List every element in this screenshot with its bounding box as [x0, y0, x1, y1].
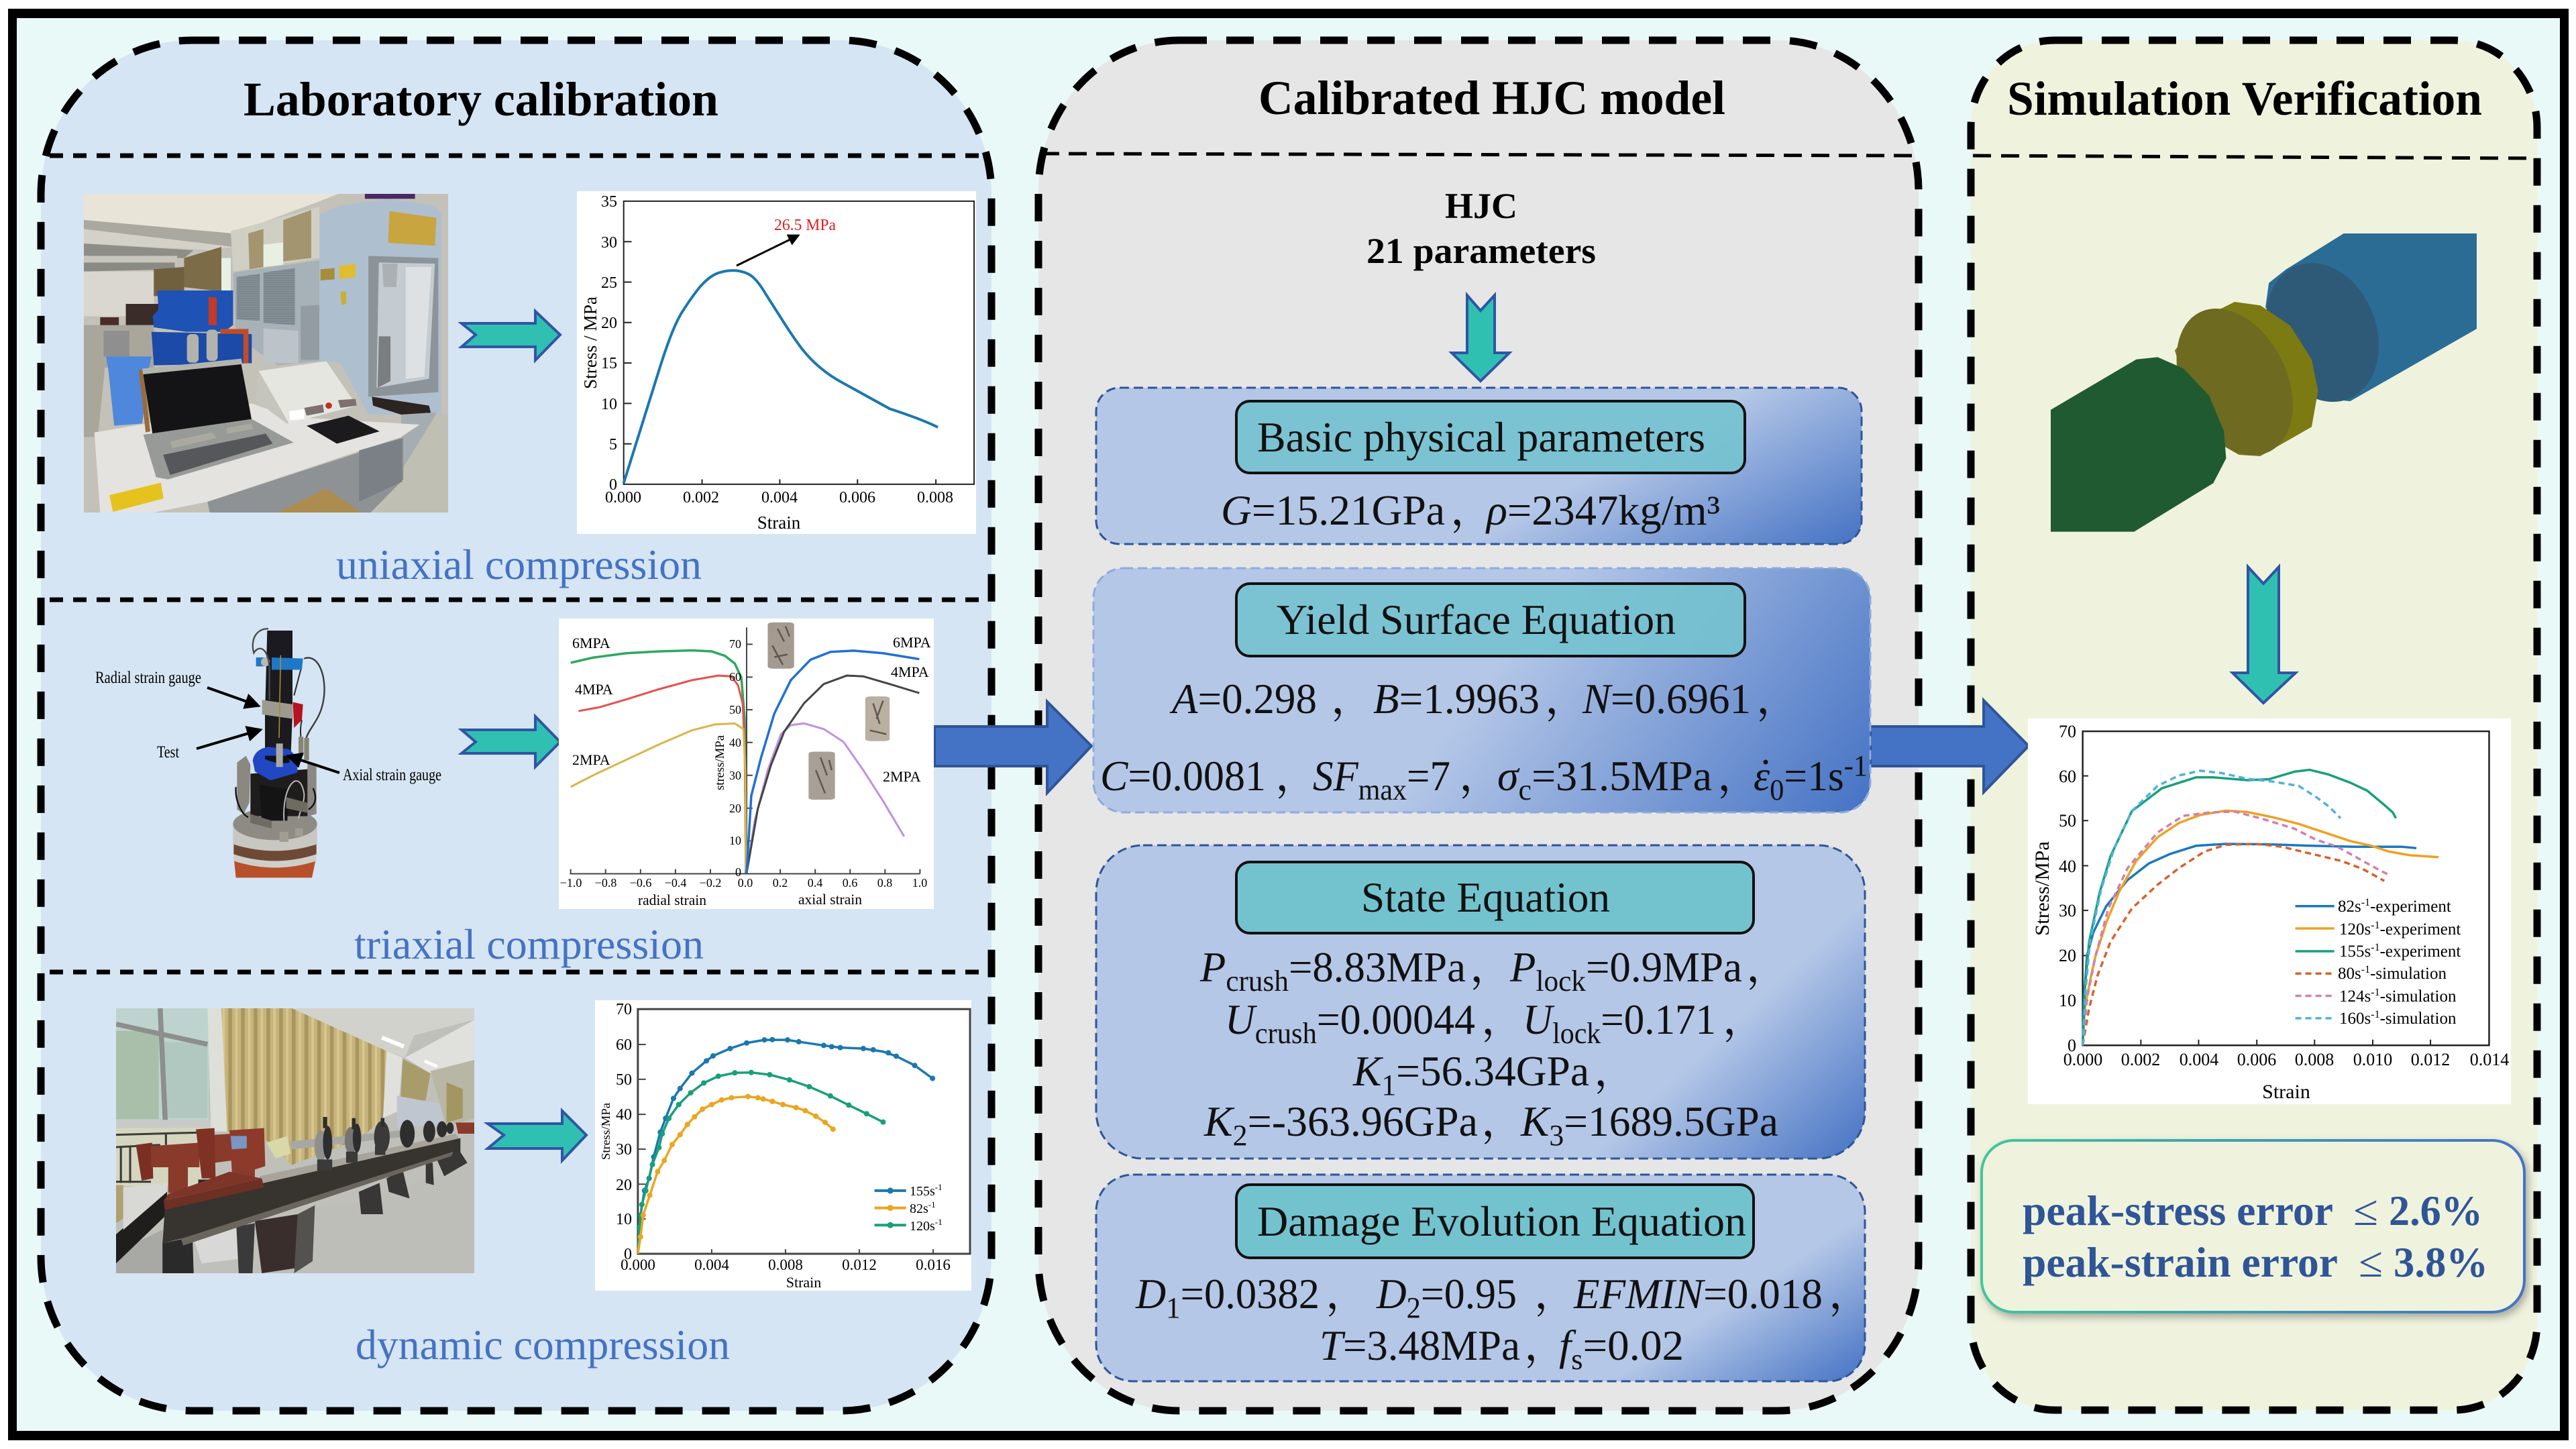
- chart: experiment vs simulation: 70: [2059, 722, 2076, 741]
- photo: split Hopkinson bar: [116, 1008, 474, 1273]
- box: state equation: P: [1199, 943, 1226, 991]
- photo: triaxial apparatus: [233, 628, 325, 877]
- chart: triaxial stress-strain: 30: [729, 769, 741, 782]
- callout: peak errors: ≤: [2359, 1238, 2383, 1286]
- box: damage evolution equation: T=3.48MPa: [1320, 1322, 1520, 1369]
- box: yield surface equation: ε: [1754, 752, 1770, 800]
- chart: triaxial stress-strain: −0.8: [595, 876, 616, 890]
- box: yield surface equation: =7: [1407, 752, 1450, 800]
- box: damage evolution equation: ，: [1326, 1270, 1368, 1318]
- box: yield surface equation: ，: [1717, 752, 1760, 800]
- box: state equation: lock: [1536, 965, 1586, 998]
- panel: simulation verification: [1971, 40, 2537, 1410]
- heading: simulation verification: Simulation Verification: [2007, 72, 2482, 125]
- box: state equation: [1096, 845, 1865, 1159]
- chart: dynamic stress-strain: 60: [616, 1036, 632, 1054]
- box: yield surface equation: A=0.298: [1169, 675, 1317, 722]
- text: HJC 21 parameters: [1366, 186, 1596, 271]
- box: yield surface equation: SF: [1313, 752, 1359, 800]
- box: yield surface equation: ，: [1545, 675, 1588, 722]
- labels and arrows: triaxial apparatus: [95, 669, 441, 784]
- chart: experiment vs simulation: 0: [2068, 1036, 2076, 1055]
- callout: peak errors: peak-stress error: [2023, 1187, 2333, 1234]
- box: state equation: K: [1352, 1047, 1384, 1095]
- labels and arrows: triaxial apparatus: Radial strain gauge: [95, 669, 201, 687]
- box: damage evolution equation: [1096, 1175, 1872, 1381]
- callout: peak errors: 3.8%: [2394, 1238, 2488, 1286]
- chart: experiment vs simulation: 82s: [2338, 898, 2361, 916]
- chart: experiment vs simulation: 120s: [2339, 920, 2371, 938]
- chart: uniaxial stress-strain: 0.002: [683, 489, 719, 506]
- chart: experiment vs simulation: 60: [2059, 767, 2076, 786]
- label: dynamic compression: dynamic compression: [356, 1321, 730, 1368]
- box: damage evolution equation: s: [1571, 1343, 1582, 1376]
- chart: triaxial stress-strain: 60: [729, 670, 741, 684]
- chart: experiment vs simulation: 0.010: [2353, 1050, 2392, 1069]
- chart: triaxial stress-strain: 0.2: [773, 876, 788, 890]
- callout: peak errors: 2.6%: [2389, 1187, 2483, 1234]
- box: state equation: ，: [1746, 943, 1789, 991]
- box: basic physical parameters: Basic physical parameters: [1257, 413, 1705, 461]
- chart: dynamic stress-strain: 40: [616, 1106, 632, 1124]
- box: damage evolution equation: Damage Evolution Equation: [1257, 1197, 1746, 1245]
- box: state equation: crush: [1255, 1017, 1317, 1050]
- arrow: model to curves: [2233, 567, 2296, 703]
- chart: triaxial stress-strain: 6MPA: [893, 634, 931, 651]
- chart: uniaxial stress-strain: 35: [601, 193, 617, 211]
- callout: peak errors: ≤: [2353, 1187, 2378, 1234]
- box: state equation: =8.83MPa: [1289, 943, 1466, 991]
- chart: experiment vs simulation: [2028, 718, 2511, 1104]
- box: basic physical parameters: ρ=2347kg/m³: [1485, 486, 1720, 534]
- chart: triaxial stress-strain: −0.2: [700, 876, 721, 890]
- chart: triaxial stress-strain: 4MPA: [891, 663, 929, 680]
- box: yield surface equation: ，: [1275, 752, 1318, 800]
- chart: experiment vs simulation: 0.000: [2063, 1050, 2102, 1069]
- labels and arrows: triaxial apparatus: Axial strain gauge: [343, 766, 441, 784]
- box: state equation: 3: [1549, 1119, 1564, 1152]
- chart: triaxial stress-strain: [559, 619, 934, 909]
- chart: experiment vs simulation: 20: [2059, 946, 2076, 965]
- box: state equation: =56.34GPa: [1396, 1047, 1589, 1095]
- chart: experiment vs simulation: -1: [2371, 1009, 2380, 1020]
- heading: calibrated HJC model: Calibrated HJC model: [1258, 71, 1725, 125]
- chart: dynamic stress-strain: 82s: [910, 1201, 928, 1216]
- label: uniaxial compression: uniaxial compression: [336, 541, 702, 588]
- chart: experiment vs simulation: 0.014: [2470, 1050, 2509, 1069]
- box: state equation: 1: [1381, 1069, 1396, 1102]
- chart: experiment vs simulation: -1: [2361, 964, 2370, 975]
- box: state equation: ，: [1481, 1097, 1524, 1145]
- chart: uniaxial stress-strain: 0.004: [761, 489, 798, 506]
- arrow: laboratory to model: [934, 702, 1091, 793]
- chart: dynamic stress-strain: [595, 1000, 971, 1291]
- chart: dynamic stress-strain: -1: [935, 1217, 943, 1227]
- box: damage evolution equation: =0.0382: [1181, 1270, 1320, 1318]
- chart: dynamic stress-strain: Strain: [786, 1274, 821, 1291]
- chart: triaxial stress-strain: 1.0: [912, 876, 927, 890]
- box: basic physical parameters: ，: [1450, 486, 1493, 534]
- box: damage evolution equation: ，: [1534, 1270, 1577, 1318]
- chart: experiment vs simulation: -experiment: [2380, 920, 2461, 938]
- chart: experiment vs simulation: Stress/MPa: [2031, 841, 2053, 936]
- box: damage evolution equation: 2: [1407, 1291, 1421, 1324]
- box: yield surface equation: N=0.6961: [1582, 675, 1751, 722]
- box: damage evolution equation: EFMIN=0.018: [1573, 1270, 1823, 1318]
- chart: dynamic stress-strain: 120s: [910, 1219, 935, 1234]
- chart: dynamic stress-strain: 20: [616, 1177, 632, 1194]
- box: damage evolution equation: =0.02: [1582, 1322, 1684, 1369]
- panel: calibrated HJC model: [1038, 40, 1919, 1411]
- chart: experiment vs simulation: -1: [2361, 897, 2370, 908]
- box: yield surface equation: [1093, 568, 1870, 812]
- chart: dynamic stress-strain: 50: [616, 1071, 632, 1089]
- box: yield surface equation: max: [1358, 773, 1407, 806]
- box: state equation: K: [1520, 1097, 1552, 1145]
- box: state equation: U: [1225, 996, 1257, 1043]
- box: state equation: State Equation: [1361, 873, 1610, 921]
- chart: triaxial stress-strain: 10: [729, 834, 741, 847]
- callout: peak errors: peak-strain error: [2023, 1238, 2338, 1286]
- chart: uniaxial stress-strain: 25: [601, 274, 617, 292]
- chart: triaxial stress-strain: 6MPA: [572, 635, 610, 651]
- chart: experiment vs simulation: 155s: [2339, 943, 2371, 961]
- chart: triaxial stress-strain: −1.0: [560, 876, 582, 890]
- chart: dynamic stress-strain: 0.012: [842, 1256, 877, 1273]
- chart: experiment vs simulation: 124s: [2339, 987, 2371, 1006]
- box: damage evolution equation: ，: [1524, 1322, 1567, 1369]
- box: state equation: =1689.5GPa: [1564, 1097, 1778, 1145]
- heading: laboratory calibration: Laboratory calibration: [244, 72, 718, 126]
- chart: triaxial stress-strain: 50: [729, 703, 741, 716]
- chart: dynamic stress-strain: 0.004: [694, 1256, 729, 1273]
- chart: dynamic stress-strain: -1: [935, 1182, 943, 1192]
- chart: uniaxial stress-strain: Stress / MPa: [580, 297, 600, 389]
- chart: experiment vs simulation: -experiment: [2380, 943, 2461, 961]
- box: state equation: ，: [1594, 1047, 1637, 1095]
- chart: experiment vs simulation: 50: [2059, 811, 2076, 830]
- box: damage evolution equation: D: [1376, 1270, 1407, 1318]
- box: yield surface equation: ，: [1331, 675, 1374, 722]
- photo: uniaxial test machine: [84, 194, 448, 513]
- chart: experiment vs simulation: 0.002: [2121, 1050, 2160, 1069]
- chart: experiment vs simulation: 0.008: [2295, 1050, 2334, 1069]
- chart: dynamic stress-strain: Stress/MPa: [599, 1103, 612, 1160]
- box: state equation: U: [1523, 996, 1555, 1043]
- chart: dynamic stress-strain: 0: [624, 1246, 632, 1263]
- chart: experiment vs simulation: -experiment: [2370, 898, 2451, 916]
- box: yield surface equation: B=1.9963: [1373, 675, 1540, 722]
- chart: experiment vs simulation: 0.004: [2180, 1050, 2218, 1069]
- chart: triaxial stress-strain: 20: [729, 802, 741, 815]
- chart: triaxial stress-strain: axial strain: [798, 891, 862, 908]
- chart: dynamic stress-strain: 30: [616, 1141, 632, 1159]
- chart: uniaxial stress-strain: 0.006: [839, 489, 875, 506]
- panel: laboratory calibration: [41, 40, 991, 1411]
- box: damage evolution equation: ，: [1829, 1270, 1872, 1318]
- chart: triaxial stress-strain: 40: [729, 736, 741, 749]
- box: damage evolution equation: f: [1559, 1322, 1576, 1369]
- chart: triaxial stress-strain: 2MPA: [572, 751, 610, 768]
- box: state equation: =-363.96GPa: [1248, 1097, 1478, 1145]
- box: state equation: ，: [1481, 996, 1524, 1043]
- box: yield surface equation: ，: [1756, 675, 1799, 722]
- box: yield surface equation: C=0.0081: [1100, 752, 1266, 800]
- chart: experiment vs simulation: -simulation: [2380, 987, 2457, 1006]
- box: state equation: ，: [1723, 996, 1766, 1043]
- box: state equation: K: [1203, 1097, 1235, 1145]
- box: state equation: 2: [1233, 1119, 1248, 1152]
- chart: experiment vs simulation: -1: [2371, 942, 2380, 953]
- chart: experiment vs simulation: 0.012: [2411, 1050, 2450, 1069]
- box: basic physical parameters: [1096, 388, 1862, 544]
- chart: dynamic stress-strain: 155s: [910, 1184, 935, 1199]
- box: state equation: crush: [1226, 965, 1289, 998]
- arrow: triaxial photo to chart: [462, 716, 560, 767]
- chart: triaxial stress-strain: 0.8: [877, 876, 892, 890]
- chart: experiment vs simulation: -1: [2371, 920, 2380, 931]
- chart: uniaxial stress-strain: 0.000: [605, 489, 641, 506]
- box: yield surface equation: =1s: [1784, 752, 1844, 800]
- chart: experiment vs simulation: -simulation: [2370, 965, 2447, 983]
- chart: uniaxial stress-strain: 10: [601, 396, 617, 413]
- box: state equation: P: [1509, 943, 1536, 991]
- box: state equation: =0.9MPa: [1586, 943, 1742, 991]
- labels and arrows: triaxial apparatus: Test: [157, 743, 179, 761]
- chart: uniaxial stress-strain: 30: [601, 234, 617, 252]
- chart: experiment vs simulation: -1: [2371, 987, 2380, 998]
- chart: experiment vs simulation: -simulation: [2380, 1010, 2457, 1028]
- chart: uniaxial stress-strain: Strain: [757, 513, 801, 533]
- box: damage evolution equation: =0.95: [1421, 1270, 1517, 1318]
- box: state equation: =0.00044: [1317, 996, 1475, 1043]
- chart: triaxial stress-strain: 0.0: [738, 876, 753, 890]
- chart: dynamic stress-strain: 0.008: [768, 1256, 803, 1273]
- chart: triaxial stress-strain: 2MPA: [883, 768, 921, 785]
- chart: uniaxial stress-strain: 0.008: [917, 489, 953, 506]
- arrow: parameters to equations: [1452, 295, 1509, 381]
- chart: experiment vs simulation: 80s: [2338, 965, 2361, 983]
- chart: uniaxial stress-strain: 5: [609, 436, 617, 453]
- chart: triaxial stress-strain: 70: [729, 637, 741, 651]
- chart: uniaxial stress-strain: 0: [609, 476, 617, 494]
- chart: triaxial stress-strain: 4MPA: [575, 681, 613, 698]
- chart: dynamic stress-strain: 0.016: [916, 1256, 951, 1273]
- chart: triaxial stress-strain: 0: [735, 865, 741, 879]
- figure: finite element bars and specimen: [2051, 233, 2477, 532]
- chart: experiment vs simulation: 10: [2059, 991, 2076, 1010]
- box: state equation: lock: [1552, 1017, 1601, 1050]
- chart: uniaxial stress-strain: 26.5 MPa: [774, 217, 836, 234]
- chart: triaxial stress-strain: 0.6: [843, 876, 857, 890]
- arrow: uniaxial photo to chart: [462, 311, 560, 360]
- box: state equation: =0.171: [1601, 996, 1716, 1043]
- box: damage evolution equation: D: [1135, 1270, 1166, 1318]
- box: yield surface equation: c: [1519, 773, 1532, 806]
- chart: experiment vs simulation: Strain: [2262, 1081, 2310, 1103]
- box: state equation: ，: [1470, 943, 1513, 991]
- chart: dynamic stress-strain: 0.000: [621, 1256, 655, 1273]
- text: HJC 21 parameters: 21 parameters: [1366, 231, 1596, 271]
- chart: experiment vs simulation: 40: [2059, 857, 2076, 876]
- chart: triaxial stress-strain: stress/MPa: [713, 735, 727, 790]
- chart: uniaxial stress-strain: 20: [601, 315, 617, 332]
- chart: uniaxial stress-strain: 15: [601, 355, 617, 372]
- box: damage evolution equation: 1: [1166, 1291, 1181, 1324]
- arrow: model to simulation: [1870, 700, 2029, 792]
- box: yield surface equation: =31.5MPa: [1532, 752, 1712, 800]
- chart: experiment vs simulation: 30: [2059, 901, 2076, 920]
- chart: dynamic stress-strain: 10: [616, 1211, 632, 1228]
- chart: triaxial stress-strain: −0.6: [630, 876, 651, 890]
- arrow: dynamic photo to chart: [488, 1111, 586, 1161]
- box: yield surface equation: Yield Surface Equation: [1277, 596, 1676, 643]
- box: yield surface equation: ，: [1459, 752, 1502, 800]
- box: yield surface equation: σ: [1497, 752, 1520, 800]
- chart: triaxial stress-strain: 0.4: [808, 876, 822, 890]
- label: triaxial compression: triaxial compression: [354, 920, 704, 968]
- chart: uniaxial stress-strain: [577, 191, 976, 534]
- chart: triaxial stress-strain: radial strain: [638, 892, 706, 908]
- box: yield surface equation: 0: [1770, 773, 1784, 806]
- callout: peak errors: [1982, 1140, 2524, 1312]
- box: yield surface equation: -1: [1844, 749, 1868, 782]
- chart: experiment vs simulation: 160s: [2339, 1010, 2371, 1028]
- chart: experiment vs simulation: 0.006: [2237, 1050, 2276, 1069]
- box: basic physical parameters: G=15.21GPa: [1221, 486, 1445, 534]
- text: HJC 21 parameters: HJC: [1445, 186, 1517, 226]
- chart: dynamic stress-strain: -1: [928, 1199, 936, 1210]
- chart: triaxial stress-strain: −0.4: [665, 876, 686, 890]
- chart: dynamic stress-strain: 70: [616, 1001, 632, 1018]
